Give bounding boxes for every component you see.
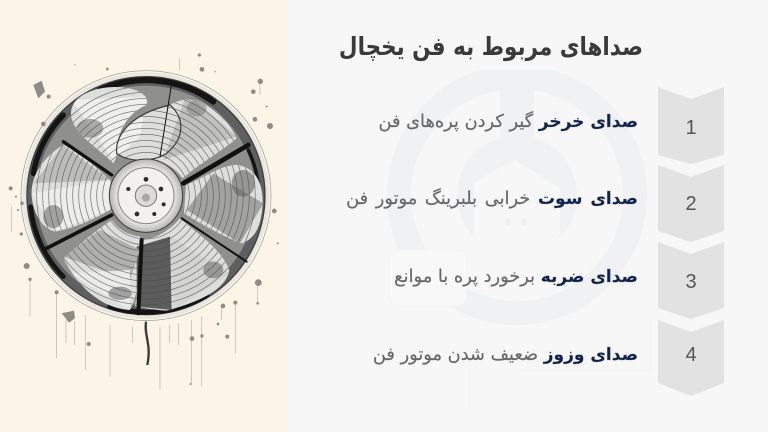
chevron: step 3: 3 xyxy=(685,271,697,293)
icon: fan xyxy=(9,53,279,389)
dark struts xyxy=(43,83,248,313)
chevron: step 4 xyxy=(658,320,724,396)
text: item 3: صدای ضربه برخورد پره با موانع xyxy=(394,266,638,287)
blades xyxy=(32,87,263,311)
text: item 1: صدای خرخر گیر کردن پره‌های فن xyxy=(378,111,638,132)
chevron: step 1: 1 xyxy=(685,117,697,139)
panel: fan illustration xyxy=(0,0,288,432)
chevron: step 2 xyxy=(658,165,724,242)
chevron: step 1 xyxy=(658,87,724,164)
text: item 2: صدای سوت خرابی بلبرینگ موتور فن xyxy=(346,188,638,209)
hub xyxy=(109,159,183,232)
chevron: step 3 xyxy=(658,242,724,319)
text: item 4: صدای وزوز ضعیف شدن موتور فن xyxy=(373,344,638,365)
rim dark arcs xyxy=(31,80,259,312)
blade outlines xyxy=(117,105,181,160)
watermark logo xyxy=(506,220,526,225)
fan housing backing xyxy=(27,76,265,315)
title: صداهای مربوط به فن یخچال xyxy=(339,32,643,61)
chevron: step 2: 2 xyxy=(685,193,697,215)
chevron: step 4: 4 xyxy=(685,344,697,366)
drips and debris xyxy=(11,58,260,389)
cable xyxy=(146,322,149,365)
